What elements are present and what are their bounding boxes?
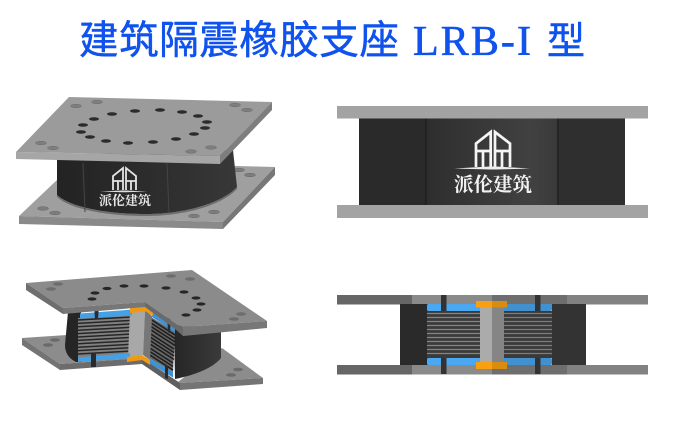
bottom plate [337, 365, 648, 374]
logo: 派伦建筑 [99, 193, 151, 208]
lead core [128, 310, 152, 360]
title [79, 19, 585, 65]
top plate [16, 97, 272, 164]
rubber body right [174, 325, 221, 379]
orange end plates [127, 306, 153, 365]
title: 建筑隔震橡胶支座 [79, 19, 399, 63]
panel: section elevation [337, 295, 648, 374]
rubber right [552, 304, 586, 365]
laminated layers left [78, 315, 132, 358]
logo [99, 168, 151, 208]
laminated layers right [503, 311, 552, 358]
bolts [91, 306, 171, 379]
blue steel plates [427, 304, 552, 365]
rubber body [57, 150, 237, 214]
bottom plate [337, 205, 648, 218]
panel: isometric cutaway [22, 270, 267, 390]
rubber body [359, 118, 625, 205]
panel: isometric view of bearing [16, 97, 275, 229]
lower plate [19, 166, 275, 229]
orange end plates [476, 301, 507, 369]
top plate [26, 270, 267, 336]
blue steel plates [78, 310, 175, 378]
logo [454, 132, 532, 196]
title: 型 [547, 21, 585, 63]
top plate [337, 106, 648, 118]
top plate [337, 295, 648, 304]
panel: front elevation [337, 106, 648, 218]
laminated layers left [427, 311, 481, 358]
rubber left [400, 304, 428, 365]
lead core [480, 305, 504, 363]
laminated layers right [149, 317, 175, 372]
title: LRB-I [413, 19, 531, 65]
bolts [441, 295, 540, 374]
lower plate [22, 335, 263, 390]
rubber body left [65, 312, 81, 362]
logo: 派伦建筑 [454, 174, 532, 196]
